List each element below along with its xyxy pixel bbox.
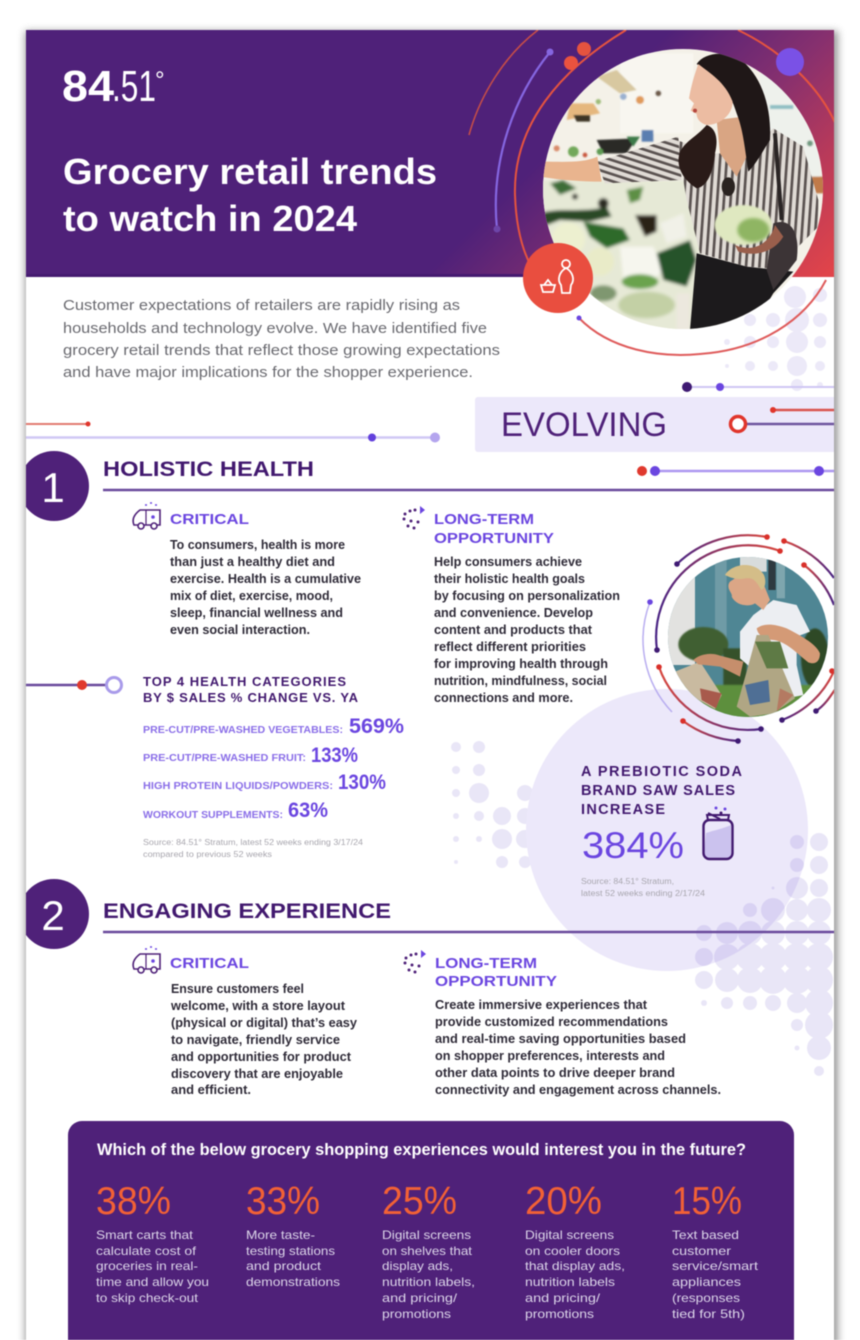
survey question: Which of the below grocery shopping experiences would interest you in the future? xyxy=(97,1141,746,1159)
top 4 health categories list: 130% xyxy=(338,771,386,794)
long-term 1 text: for improving health through xyxy=(434,657,608,671)
stat: 15%: customer xyxy=(672,1244,731,1258)
long-term 2 text: other data points to drive deeper brand xyxy=(435,1066,675,1080)
stat: 25%: on shelves that xyxy=(382,1244,473,1258)
top 4 health categories list: PRE-CUT/PRE-WASHED FRUIT: xyxy=(143,752,306,764)
header band xyxy=(26,30,834,277)
banner: evolving xyxy=(475,397,845,452)
panel: big lilac circle xyxy=(526,689,808,971)
long-term 1 text: and convenience. Develop xyxy=(434,606,593,620)
stat: 25%: display ads, xyxy=(382,1259,453,1273)
skirt xyxy=(690,253,793,330)
long-term 2 text: Create immersive experiences that xyxy=(435,998,648,1012)
top 4 health categories list xyxy=(143,674,404,859)
top 4 health categories list: 63% xyxy=(288,799,328,822)
critical 2 text: discovery that are enjoyable xyxy=(171,1067,343,1081)
photo: woman shopping for produce xyxy=(540,47,830,337)
shirt xyxy=(740,600,810,698)
callout: prebiotic soda: BRAND SAW SALES xyxy=(581,783,735,799)
shirt torso xyxy=(677,128,818,270)
stat: 15% xyxy=(672,1180,759,1321)
stat: 20%: on cooler doors xyxy=(525,1244,620,1258)
top 4 health categories list: WORKOUT SUPPLEMENTS: xyxy=(143,809,283,821)
stat: 33%: and product xyxy=(246,1259,322,1273)
stat: 38% xyxy=(96,1180,209,1305)
long-term 2 text: OPPORTUNITY xyxy=(435,973,557,990)
hand and bag xyxy=(767,222,797,290)
top 4 health categories list: TOP 4 HEALTH CATEGORIES xyxy=(143,674,346,689)
logo: .51 xyxy=(112,62,156,111)
stat: 20%: nutrition labels xyxy=(525,1275,615,1289)
title xyxy=(62,156,436,232)
callout: prebiotic soda: Source: 84.51° Stratum, xyxy=(581,877,674,886)
stat: 15%: Text based xyxy=(672,1228,739,1242)
background dot pattern: lower right xyxy=(695,833,833,1076)
neck skin xyxy=(717,117,748,177)
panel: shopping experience survey xyxy=(68,1121,794,1340)
neck and face xyxy=(728,578,770,610)
logo: 84 xyxy=(62,62,115,111)
critical 2 text: CRITICAL xyxy=(170,955,249,972)
callout: prebiotic soda xyxy=(581,764,743,898)
stat: 25%: and pricing/ xyxy=(382,1291,458,1305)
section 2 number badge xyxy=(19,879,89,949)
title: to watch in 2024 xyxy=(63,198,357,239)
stat: 20%: Digital screens xyxy=(525,1228,614,1242)
section 1 number badge: 1 xyxy=(41,464,65,511)
long-term 2 text xyxy=(435,955,721,1097)
connector lines right xyxy=(637,382,834,476)
intro text xyxy=(63,297,500,381)
stat: 15%: tied for 5th) xyxy=(672,1307,745,1321)
callout: prebiotic soda: INCREASE xyxy=(581,802,665,818)
stat: 25%: 25% xyxy=(382,1180,457,1223)
section 2 number badge: 2 xyxy=(41,892,65,939)
stat: 15%: 15% xyxy=(672,1180,742,1223)
strap and sunglasses xyxy=(775,133,782,220)
long-term 1 text: connections and more. xyxy=(434,691,573,705)
critical 1 text: even social interaction. xyxy=(170,623,310,637)
intro text: Customer expectations of retailers are rapidly rising as xyxy=(63,297,460,314)
critical 1 text xyxy=(170,511,361,637)
stat: 15%: (responses xyxy=(672,1291,740,1305)
hair xyxy=(697,54,770,172)
stat: 38%: groceries in real- xyxy=(96,1259,198,1273)
arcs around man photo xyxy=(643,534,836,744)
stat: 20%: and pricing/ xyxy=(525,1291,601,1305)
critical 1 text: mix of diet, exercise, mood, xyxy=(170,589,333,603)
long-term 2 text: on shopper preferences, interests and xyxy=(435,1049,665,1063)
stat: 38%: calculate cost of xyxy=(96,1244,197,1258)
sleeve xyxy=(597,137,682,183)
critical 2 text: and efficient. xyxy=(171,1083,251,1097)
top 4 health categories list: 569% xyxy=(349,715,404,738)
header arcs and dots xyxy=(469,30,838,268)
long-term 1 text: content and products that xyxy=(434,623,593,637)
critical 1 text: To consumers, health is more xyxy=(170,538,345,552)
critical 1 text: than just a healthy diet and xyxy=(170,555,335,569)
section 1 number badge xyxy=(19,451,89,521)
cabbage xyxy=(715,205,772,245)
stat: 25% xyxy=(382,1180,475,1321)
callout: prebiotic soda: latest 52 weeks ending 2/17/24 xyxy=(581,889,706,898)
critical 1 text: CRITICAL xyxy=(170,511,249,528)
connector line to chart list xyxy=(26,678,122,692)
stat: 33%: 33% xyxy=(246,1180,320,1223)
top 4 health categories list: HIGH PROTEIN LIQUIDS/POWDERS: xyxy=(143,780,333,792)
title: Grocery retail trends xyxy=(63,151,437,192)
icon: soda jar xyxy=(704,806,732,859)
top 4 health categories list: 133% xyxy=(311,744,358,767)
top 4 health categories list: BY $ SALES % CHANGE VS. YA xyxy=(143,690,359,705)
stat: 25%: nutrition labels, xyxy=(382,1275,475,1289)
stat: 20%: that display ads, xyxy=(525,1259,625,1273)
intro text: households and technology evolve. We have identified five xyxy=(63,320,487,337)
icon: long-term 1 xyxy=(402,506,425,530)
stat: 38%: Smart carts that xyxy=(96,1228,194,1242)
section 1 heading: HOLISTIC HEALTH xyxy=(103,458,314,481)
long-term 1 text: Help consumers achieve xyxy=(434,555,582,569)
critical 2 text xyxy=(170,955,357,1097)
arc under the photo xyxy=(579,280,826,355)
critical 1 text: exercise. Health is a cumulative xyxy=(170,572,361,586)
left bag xyxy=(675,662,722,709)
stat: 33% xyxy=(246,1180,340,1289)
long-term 1 text: OPPORTUNITY xyxy=(434,530,554,547)
long-term 1 text: by focusing on personalization xyxy=(434,589,620,603)
background dot pattern: middle xyxy=(451,741,534,868)
section 2 heading: ENGAGING EXPERIENCE xyxy=(103,900,391,923)
critical 2 text: welcome, with a store layout xyxy=(170,999,346,1013)
icon: shopper badge xyxy=(523,243,593,313)
intro text: and have major implications for the shopper experience. xyxy=(63,364,473,381)
callout: prebiotic soda: A PREBIOTIC SODA xyxy=(581,764,743,780)
critical 2 text: Ensure customers feel xyxy=(171,982,304,996)
photo: man with grocery bags xyxy=(663,555,833,718)
produce base xyxy=(540,180,700,337)
stat: 33%: demonstrations xyxy=(246,1275,340,1289)
long-term 1 text: nutrition, mindfulness, social xyxy=(434,674,607,688)
stat: 38%: time and allow you xyxy=(96,1275,209,1289)
long-term 2 text: LONG-TERM xyxy=(435,955,537,972)
stat: 25%: Digital screens xyxy=(382,1228,471,1242)
stat: 20%: promotions xyxy=(525,1307,594,1321)
logo: ° xyxy=(155,67,165,94)
stat: 25%: promotions xyxy=(382,1307,451,1321)
right bag xyxy=(737,635,795,717)
long-term 1 text: their holistic health goals xyxy=(434,572,585,586)
stat: 15%: appliances xyxy=(672,1275,741,1289)
stat: 33%: More taste- xyxy=(246,1228,315,1242)
long-term 1 text: LONG-TERM xyxy=(434,511,534,528)
stat: 20% xyxy=(525,1180,625,1321)
background dot pattern: upper right xyxy=(724,286,827,391)
icon: critical 2 xyxy=(133,947,160,973)
long-term 2 text: provide customized recommendations xyxy=(435,1015,668,1029)
arm xyxy=(540,157,602,182)
critical 1 text: sleep, financial wellness and xyxy=(170,606,343,620)
icon: critical 1 xyxy=(133,503,160,529)
stat: 33%: testing stations xyxy=(246,1244,335,1258)
face xyxy=(689,64,733,125)
long-term 1 text xyxy=(434,511,620,705)
logo xyxy=(62,70,164,102)
right arm xyxy=(757,625,820,663)
connector lines left xyxy=(26,422,440,442)
banner: evolving: EVOLVING xyxy=(501,406,667,444)
critical 2 text: to navigate, friendly service xyxy=(171,1033,340,1047)
stat: 38%: to skip check-out xyxy=(96,1291,199,1305)
hair xyxy=(725,565,765,590)
stat: 15%: service/smart xyxy=(672,1259,759,1273)
critical 2 text: and opportunities for product xyxy=(171,1050,352,1064)
callout: prebiotic soda: 384% xyxy=(582,825,684,866)
long-term 1 text: reflect different priorities xyxy=(434,640,586,654)
long-term 2 text: connectivity and engagement across channels. xyxy=(435,1083,721,1097)
top 4 health categories list: Source: 84.51° Stratum, latest 52 weeks ending 3/17/24 xyxy=(143,838,364,847)
stat: 20%: 20% xyxy=(525,1180,602,1223)
top 4 health categories list: PRE-CUT/PRE-WASHED VEGETABLES: xyxy=(143,724,343,736)
top 4 health categories list: compared to previous 52 weeks xyxy=(143,850,272,859)
critical 2 text: (physical or digital) that’s easy xyxy=(171,1016,357,1030)
stat: 38%: 38% xyxy=(96,1180,171,1223)
left arm xyxy=(693,654,743,677)
icon: long-term 2 xyxy=(404,950,426,974)
intro text: grocery retail trends that reflect those growing expectations xyxy=(63,342,500,359)
long-term 2 text: and real-time saving opportunities based xyxy=(435,1032,686,1046)
